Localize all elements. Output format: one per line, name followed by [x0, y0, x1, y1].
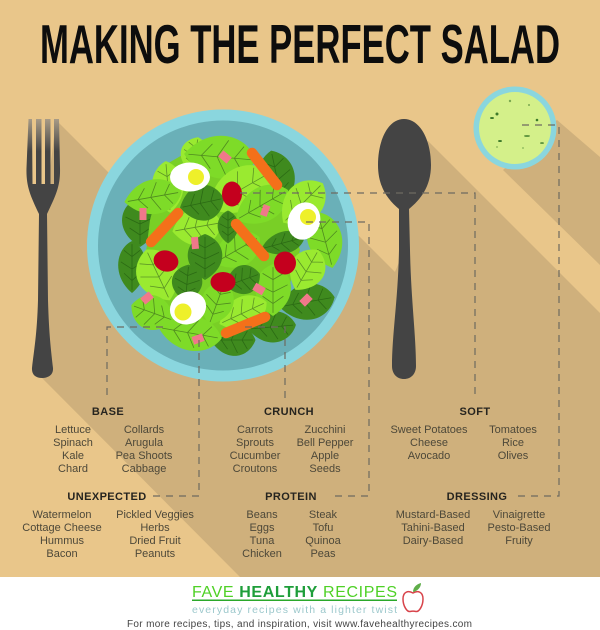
list: unexpected: Hummus [40, 535, 84, 547]
cup rim [474, 86, 556, 170]
list: crunch: Croutons [233, 463, 278, 475]
list: unexpected: Cottage Cheese [22, 522, 102, 534]
ham pieces [140, 150, 313, 345]
list: soft: Olives [498, 450, 529, 462]
bowl with salad [87, 110, 359, 382]
icon: fork [26, 119, 60, 378]
list: base [53, 406, 173, 475]
carrots [151, 153, 277, 333]
list: protein: Chicken [242, 548, 282, 560]
dark leaves on top [170, 181, 308, 303]
list: base: Chard [58, 463, 88, 475]
list: base: Pea Shoots [116, 450, 173, 462]
list: base: Kale [62, 450, 84, 462]
list: protein: Tofu [313, 522, 333, 534]
long shadow of dressing cup [503, 120, 600, 265]
list: crunch [230, 406, 354, 475]
list: soft [390, 406, 537, 462]
list: protein [242, 491, 342, 560]
tomatoes [151, 182, 296, 292]
list: dressing: Fruity [505, 535, 533, 547]
list: soft: SOFT [460, 406, 490, 418]
brand name: FAVE HEALTHY RECIPES [192, 584, 397, 601]
list: dressing: Tahini-Based [401, 522, 465, 534]
list: unexpected [22, 491, 194, 560]
list: unexpected: Bacon [46, 548, 78, 560]
list: base: BASE [92, 406, 124, 418]
tagline: everyday recipes with a lighter twist [192, 604, 397, 616]
list: base: Cabbage [122, 463, 166, 475]
long shadow of cutlery and bowl [42, 120, 600, 577]
bowl interior [98, 120, 348, 370]
list: dressing [396, 491, 550, 547]
light lettuce leaves [121, 133, 349, 356]
list: crunch: Carrots [237, 424, 274, 436]
list: soft: Sweet Potatoes [390, 424, 468, 436]
list: crunch: Seeds [309, 463, 341, 475]
list: crunch: Apple [311, 450, 339, 462]
list: protein: Steak [309, 509, 338, 521]
list: base: Collards [124, 424, 165, 436]
list: protein: Eggs [249, 522, 275, 534]
list: crunch: Sprouts [236, 437, 274, 449]
list: dressing: Pesto-Based [488, 522, 550, 534]
list: protein: Quinoa [305, 535, 342, 547]
eggs [164, 162, 326, 330]
list: crunch: Zucchini [305, 424, 345, 436]
list: unexpected: UNEXPECTED [67, 491, 147, 503]
icon: spoon [378, 119, 431, 379]
bowl rim [87, 110, 359, 382]
list: base: Spinach [53, 437, 93, 449]
list: unexpected: Herbs [140, 522, 170, 534]
dressing cup [474, 86, 556, 170]
list: protein: Tuna [250, 535, 275, 547]
herb specks [490, 100, 544, 149]
list: soft: Tomatoes [489, 424, 537, 436]
list: base: Arugula [125, 437, 164, 449]
list: protein: PROTEIN [265, 491, 317, 503]
list: dressing: Dairy-Based [403, 535, 463, 547]
list: soft: Avocado [408, 450, 450, 462]
dashed connector lines [107, 125, 559, 496]
dressing [479, 92, 551, 164]
icon: apple [403, 583, 423, 612]
list: protein: Peas [310, 548, 336, 560]
list: crunch: CRUNCH [264, 406, 314, 418]
list: unexpected: Watermelon [33, 509, 91, 521]
list: unexpected: Pickled Veggies [116, 509, 194, 521]
list: dressing: DRESSING [447, 491, 507, 503]
brand underline [192, 600, 397, 601]
list: crunch: Bell Pepper [297, 437, 354, 449]
list: crunch: Cucumber [230, 450, 281, 462]
dark spinach leaves [118, 147, 338, 356]
list: soft: Rice [502, 437, 524, 449]
list: protein: Beans [246, 509, 278, 521]
list: unexpected: Peanuts [135, 548, 176, 560]
list: dressing: Vinaigrette [493, 509, 545, 521]
footer band [0, 577, 600, 630]
list: base: Lettuce [55, 424, 91, 436]
footer credit: For more recipes, tips, and inspiration, visit www.favehealthyrecipes.com [127, 619, 472, 630]
list: dressing: Mustard-Based [396, 509, 470, 521]
list: unexpected: Dried Fruit [129, 535, 181, 547]
list: soft: Cheese [410, 437, 448, 449]
